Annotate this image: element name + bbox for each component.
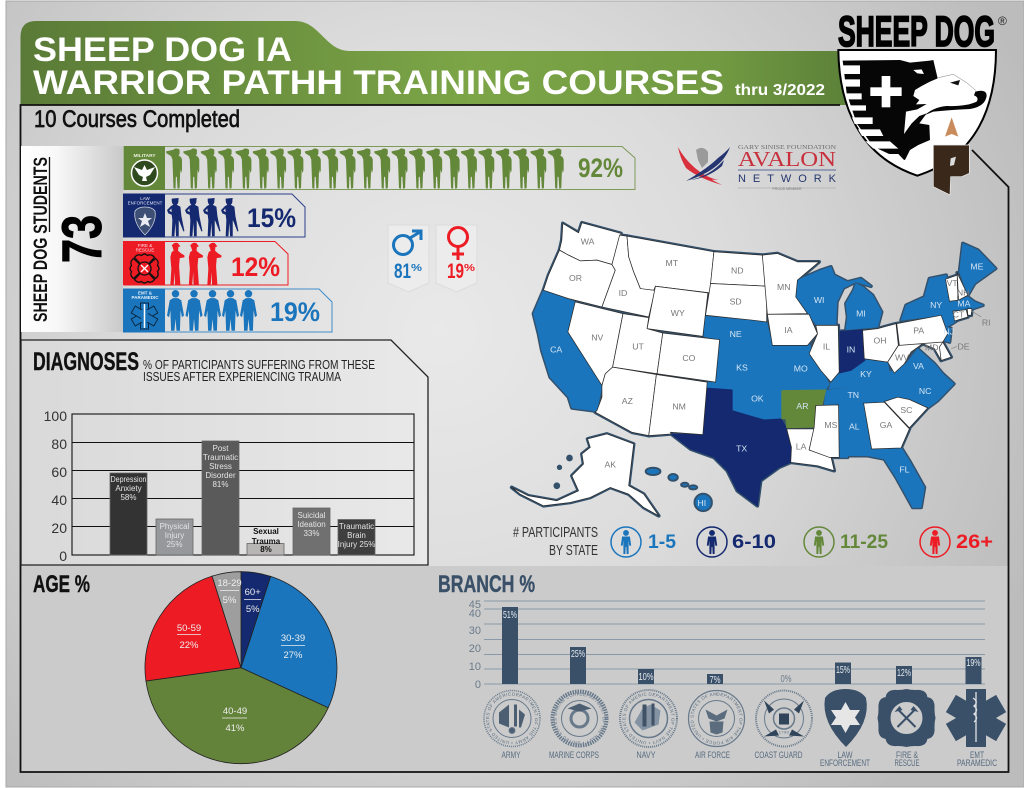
icon: army seal: DEPARTMENT OF THE ARMY • UNITED STATES OF AMERICA: [486, 692, 538, 744]
US map: participants by state: IA: [784, 325, 793, 335]
logo: Avalon Network: NETWORK: [738, 173, 837, 185]
US map: participants by state: WV: [895, 352, 909, 362]
legend: 6-10: [697, 527, 776, 557]
pie chart: age: [145, 572, 337, 764]
icon: coast guard seal: 1790: [779, 730, 790, 734]
pie chart: age: 30-39: [281, 633, 305, 644]
pie chart: age: 18-29: [217, 578, 242, 589]
bar chart: diagnoses: Anxiety: [115, 484, 142, 493]
panel: student total: 73: [50, 215, 113, 263]
diagnoses subtitle: [143, 357, 375, 384]
panel: diagnoses: [21, 340, 428, 565]
branch labels: AIR FORCE: [695, 750, 730, 760]
row: law enforcement 15%: ENFORCEMENT: [128, 200, 163, 206]
branch labels: EMT: [970, 750, 984, 760]
branch labels: [502, 750, 997, 768]
title banner: thru 3/2022: [735, 82, 825, 99]
US map: participants by state: AR: [796, 401, 808, 411]
US map: participants by state: HI: [698, 498, 706, 508]
pie chart: age: 22%: [179, 640, 199, 651]
heading: diagnoses: DIAGNOSES: [33, 348, 139, 376]
US map: participants by state: MO: [794, 363, 808, 373]
pie chart: age: 5%: [223, 595, 237, 606]
bar chart: diagnoses: 100: [44, 408, 67, 424]
bar chart: branch: 0%: [780, 673, 792, 685]
icon: star of life: [946, 689, 1006, 747]
legend: 1-5: [611, 527, 676, 557]
US map: participants by state: TN: [847, 390, 859, 400]
bar chart: branch: 12%: [897, 667, 911, 679]
US map: participants by state: WA: [581, 236, 595, 246]
US map: participants by state: OR: [569, 273, 582, 283]
courses completed heading: 10 Courses Completed: [34, 106, 240, 133]
logo: Avalon Network: [678, 145, 837, 191]
bar chart: diagnoses: [44, 408, 414, 564]
US map: participants by state: IN: [847, 344, 855, 354]
row: fire and rescue 12%: RESCUE: [136, 248, 154, 252]
bar chart: diagnoses: 0: [59, 548, 67, 564]
US map: participants by state: IL: [823, 342, 830, 352]
icon: marine corps seal: DEPARTMENT OF THE NAVY • UNITED STATES MARINE CORPS: [554, 692, 606, 744]
bar chart: diagnoses: Ideation: [297, 520, 326, 529]
icon: law enforcement badge: [824, 689, 867, 747]
branch labels: NAVY: [636, 750, 656, 760]
logo: Sheep Dog shield: ®: [998, 14, 1007, 28]
row: military 92%: [124, 146, 635, 190]
bar chart: diagnoses: Suicidal: [297, 511, 326, 520]
title banner: SHEEP DOG IA: [33, 31, 292, 69]
US map: participants by state: LA: [796, 442, 807, 452]
bar chart: diagnoses: Stress: [209, 462, 232, 471]
bar chart: branch: 10%: [638, 671, 654, 683]
bar chart: diagnoses: Post: [212, 444, 229, 453]
row: military 92%: 92%: [578, 153, 623, 183]
branch labels: MARINE CORPS: [549, 750, 599, 760]
US map: participants by state: NV: [591, 332, 603, 342]
legend: 11-25: 11-25: [840, 532, 888, 553]
row: military 92%: MILITARY: [133, 153, 156, 159]
row: law enforcement 15%: 15%: [247, 203, 296, 233]
gender card: female 19%: [436, 225, 477, 292]
US map: participants by state: VA: [913, 361, 924, 371]
row: law enforcement 15%: LAW: [140, 196, 151, 201]
US map: participants by state: MS: [824, 420, 838, 430]
US map: participants by state: SC: [900, 405, 912, 415]
bar chart: branch: [469, 599, 985, 691]
branch labels: ENFORCEMENT: [820, 758, 870, 768]
legend title: # PARTICIPANTS: [513, 524, 598, 541]
US map: participants by state: [512, 223, 996, 516]
US map: participants by state: WI: [814, 295, 824, 305]
US map: participants by state: MD: [925, 342, 939, 352]
US map: participants by state: NJ: [944, 326, 954, 336]
US map: participants by state: MN: [777, 282, 790, 292]
pie chart: age: 41%: [225, 723, 245, 734]
US map: participants by state: FL: [899, 464, 910, 474]
bar chart: diagnoses: Traumatic: [203, 453, 238, 462]
legend title: BY STATE: [549, 542, 598, 559]
bar chart: diagnoses: Trauma: [252, 537, 281, 546]
panel: age and branch background: [21, 566, 1009, 772]
US map: participants by state: NC: [919, 386, 931, 396]
row: EMT and paramedic 19%: [123, 288, 332, 332]
bar chart: branch: 40: [469, 608, 481, 620]
bar chart: branch: 45: [469, 599, 481, 611]
icon: navy seal: DEPARTMENT OF THE NAVY • UNITED STATES OF AMERICA: [622, 692, 674, 744]
gender card: male 81%: [388, 225, 429, 292]
US map: participants by state: OH: [873, 336, 886, 346]
legend: 1-5: 1-5: [648, 532, 676, 553]
icon: coast guard seal: [756, 690, 812, 746]
row: fire and rescue 12%: [123, 241, 288, 285]
bar chart: branch: 19%: [966, 657, 980, 669]
bar chart: branch: 51%: [503, 609, 517, 621]
US map: participants by state: AL: [849, 422, 860, 432]
bar chart: diagnoses: Traumatic: [339, 522, 374, 531]
US map: participants by state: NE: [730, 329, 742, 339]
row: fire and rescue 12%: 12%: [231, 252, 280, 282]
logo: Avalon Network: AVALON: [738, 147, 836, 171]
logo: Sheep Dog shield: [838, 8, 1007, 195]
bar chart: diagnoses: 8%: [260, 545, 272, 554]
bar chart: diagnoses: 81%: [212, 480, 229, 489]
legend: 26+: [920, 527, 993, 557]
US map: participants by state: AZ: [622, 396, 634, 406]
legend title: [513, 524, 598, 559]
branch labels: RESCUE: [894, 758, 920, 768]
gender card: male 81%: 81: [394, 260, 411, 283]
pie chart: age: 5%: [246, 604, 260, 615]
bar chart: diagnoses: 40: [51, 492, 67, 508]
US map: participants by state: NH: [957, 288, 969, 298]
map legend: [513, 524, 993, 559]
row: fire and rescue 12%: FIRE &: [138, 243, 152, 248]
icon: fire and rescue cross: [878, 689, 936, 747]
US map: participants by state: SD: [730, 297, 742, 307]
bar chart: diagnoses: 33%: [303, 529, 320, 538]
US map: participants by state: GA: [880, 420, 892, 430]
title banner: WARRIOR PATHH TRAINING COURSES: [33, 64, 724, 102]
bar chart: diagnoses: 60: [51, 464, 67, 480]
heading: branch: BRANCH %: [438, 571, 535, 598]
gender card: male 81%: %: [411, 263, 422, 274]
diagnoses subtitle: ISSUES AFTER EXPERIENCING TRAUMA: [143, 369, 341, 384]
US map: participants by state: ND: [731, 266, 744, 276]
bar chart: diagnoses: Injury: [165, 531, 184, 540]
bar chart: diagnoses: Brain: [347, 531, 366, 540]
gender card: female 19%: 19: [447, 260, 464, 283]
bar chart: diagnoses: 20: [51, 520, 67, 536]
logo: Avalon Network: GARY SINISE FOUNDATION: [738, 145, 837, 151]
bar chart: branch: 25%: [571, 648, 585, 660]
US map: participants by state: PA: [913, 326, 924, 336]
US map: participants by state: UT: [632, 341, 645, 351]
diagnoses subtitle: % OF PARTICIPANTS SUFFERING FROM THESE: [143, 357, 375, 372]
US map: participants by state: AK: [604, 459, 616, 469]
bar chart: branch: 20: [469, 643, 481, 655]
branch labels: COAST GUARD: [754, 750, 803, 760]
US map: participants by state: TX: [736, 444, 747, 454]
row: EMT and paramedic 19%: PARAMEDIC: [132, 295, 159, 300]
legend: 26+: 26+: [956, 532, 993, 553]
US map: participants by state: NY: [930, 300, 942, 310]
US map: participants by state: DE: [958, 342, 970, 352]
logo: Avalon Network: PROUD MEMBER: [773, 187, 802, 191]
row: law enforcement 15%: [123, 194, 305, 238]
US map: participants by state: CT: [953, 310, 965, 320]
bar chart: branch: 30: [469, 625, 481, 637]
heading: age: AGE %: [33, 571, 90, 598]
bar chart: diagnoses: Sexual: [253, 527, 279, 536]
pie chart: age: 40-49: [223, 706, 247, 717]
row: EMT and paramedic 19%: EMT &: [138, 290, 153, 296]
pie chart: age: 27%: [283, 650, 303, 661]
US map: participants by state: ID: [619, 288, 627, 298]
panel: student total: SHEEP DOG STUDENTS: [31, 157, 52, 322]
US map: participants by state: CO: [682, 353, 696, 363]
bar chart: diagnoses: 58%: [120, 493, 137, 502]
bar chart: branch: 7%: [710, 674, 720, 686]
branch labels: FIRE &: [896, 750, 918, 760]
bar chart: diagnoses: 80: [51, 436, 67, 452]
branch labels: PARAMEDIC: [957, 758, 997, 768]
US map: participants by state: MI: [856, 308, 866, 318]
bar chart: diagnoses: 25%: [166, 540, 183, 549]
title banner: [20, 21, 850, 105]
gender card: female 19%: %: [464, 263, 475, 274]
branch labels: ARMY: [502, 750, 520, 760]
US map: participants by state: CA: [550, 344, 562, 354]
US map: participants by state: VT: [947, 278, 958, 288]
bar chart: branch: 15%: [836, 664, 850, 676]
bar chart: branch: 10: [469, 661, 481, 673]
bar chart: diagnoses: Disorder: [205, 471, 236, 480]
icon: air force seal: DEPARTMENT OF THE AIR FORCE • UNITED STATES OF AMERICA: [690, 692, 742, 745]
US map: participants by state: RI: [982, 317, 991, 327]
US map: participants by state: KY: [860, 369, 872, 379]
pie chart: age: 60+: [245, 587, 261, 598]
bar chart: diagnoses: Injury 25%: [338, 540, 375, 549]
row: EMT and paramedic 19%: 19%: [270, 297, 320, 327]
panel: student total: [21, 146, 123, 332]
legend: 11-25: [804, 527, 888, 557]
legend: 6-10: 6-10: [732, 532, 776, 553]
US map: participants by state: MA: [957, 298, 971, 308]
US map: participants by state: NM: [672, 402, 686, 412]
US map: participants by state: ME: [970, 262, 984, 272]
bar chart: diagnoses: Physical: [160, 522, 190, 531]
pie chart: age: 50-59: [177, 623, 201, 634]
bar chart: diagnoses: Depression: [110, 475, 146, 484]
US map: participants by state: KS: [736, 362, 748, 372]
bar chart: branch: 0: [475, 679, 481, 691]
US map: participants by state: MT: [666, 258, 679, 268]
branch labels: LAW: [838, 750, 853, 760]
US map: participants by state: OK: [751, 394, 764, 404]
US map: participants by state: WY: [671, 308, 685, 318]
